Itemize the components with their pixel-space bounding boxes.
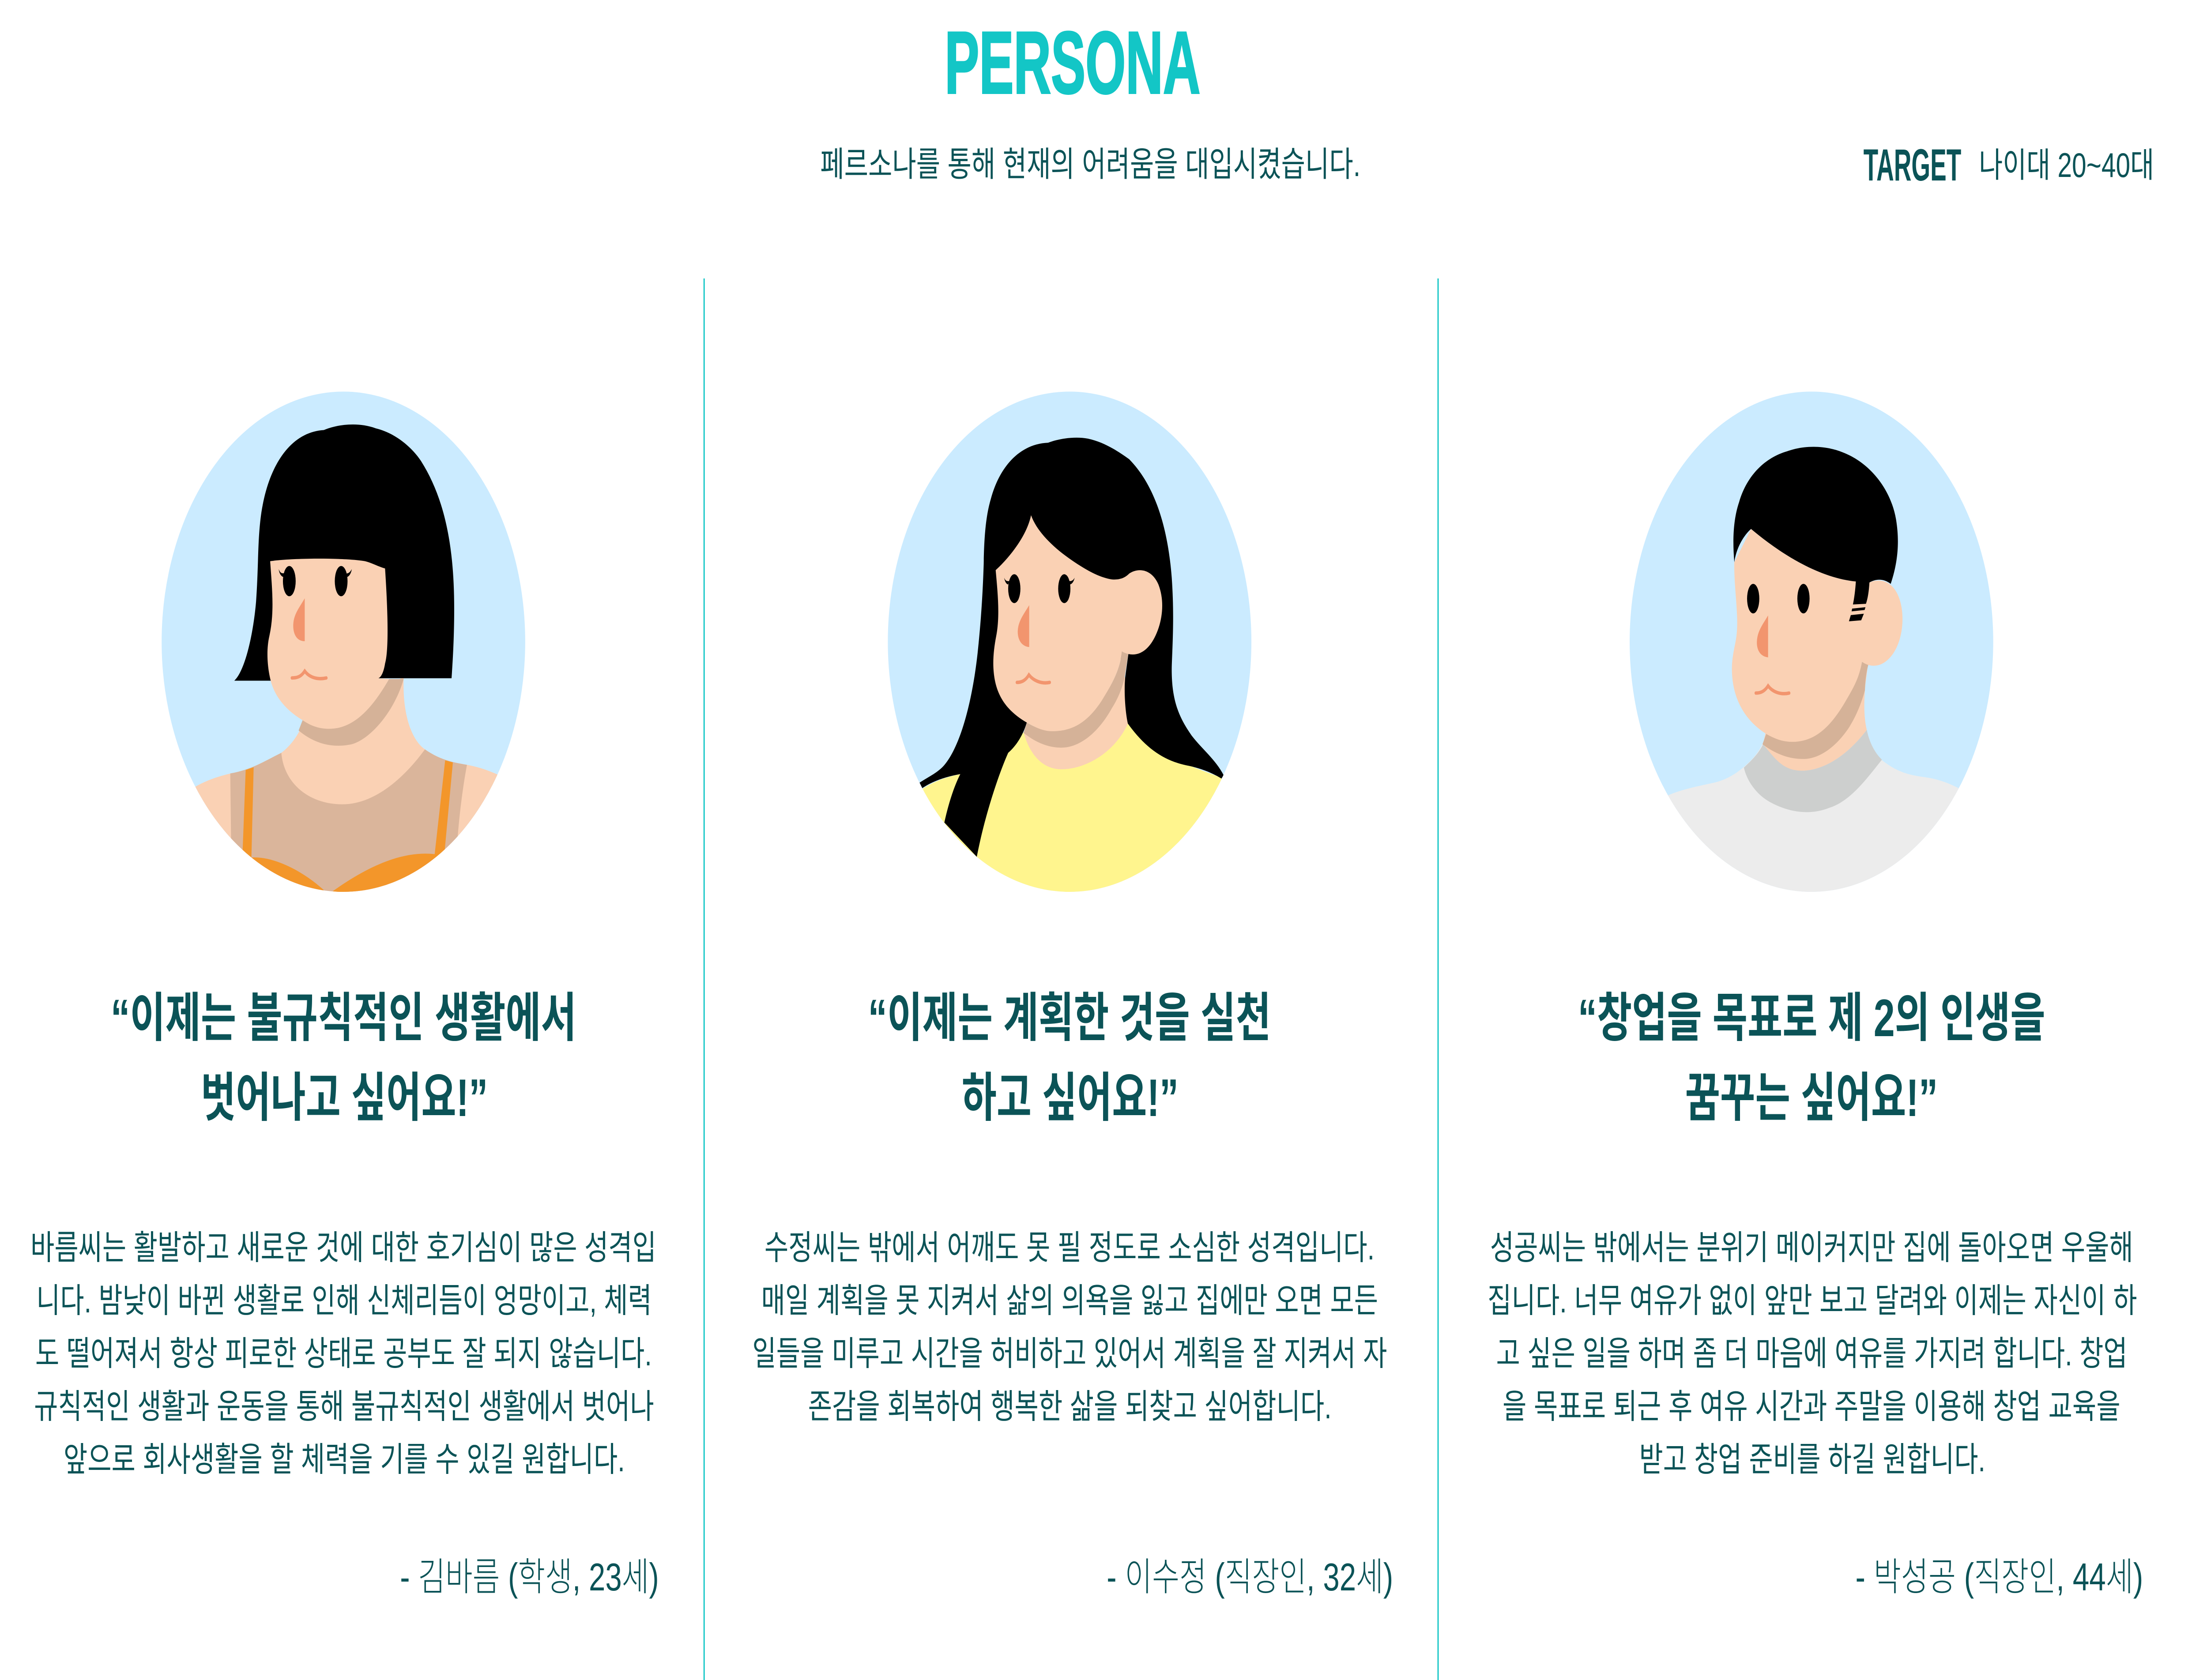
description 1: 니다. 밤낮이 바뀐 생활로 인해 신체리듬이 엉망이고, 체력 [36,1282,652,1320]
panel: persona 2 [752,375,1393,1599]
panel: persona 3 [1488,375,2143,1599]
attribution 1: - 김바름 (학생, 23세) [400,1556,659,1599]
description 3 [1488,1229,2137,1479]
quote heading 3 [1578,988,2045,1128]
description 2 [752,1229,1387,1426]
description 2: 수정씨는 밖에서 어깨도 못 필 정도로 소심한 성격입니다. [765,1229,1375,1267]
description 3: 집니다. 너무 여유가 없이 앞만 보고 달려와 이제는 자신이 하 [1488,1282,2137,1320]
quote heading 3: “창업을 목표로 제 2의 인생을 [1578,988,2045,1048]
column divider left [704,278,705,1680]
subtitle: 페르소나를 통해 현재의 어려움을 대입시켰습니다. [820,145,1360,184]
attribution 2: - 이수정 (직장인, 32세) [1107,1556,1393,1599]
column divider right [1438,278,1439,1680]
quote heading 1: “이제는 불규칙적인 생활에서 [111,988,576,1048]
attribution 3: - 박성공 (직장인, 44세) [1855,1556,2143,1599]
description 1: 도 떨어져서 항상 피로한 상태로 공부도 잘 되지 않습니다. [35,1335,652,1373]
description 2: 매일 계획을 못 지켜서 삶의 의욕을 잃고 집에만 오면 모든 [761,1282,1378,1320]
description 1: 규칙적인 생활과 운동을 통해 불규칙적인 생활에서 벗어나 [34,1388,654,1426]
description 3: 받고 창업 준비를 하길 원합니다. [1639,1441,1985,1479]
description 3: 고 싶은 일을 하며 좀 더 마음에 여유를 가지려 합니다. 창업 [1496,1335,2128,1373]
portrait: short bob hair woman [162,391,525,892]
quote heading 2: “이제는 계획한 것을 실천 [868,988,1271,1048]
description 1: 바름씨는 활발하고 새로운 것에 대한 호기심이 많은 성격입 [30,1229,656,1267]
description 3: 을 목표로 퇴근 후 여유 시간과 주말을 이용해 창업 교육을 [1503,1388,2120,1426]
description 2: 존감을 회복하여 행복한 삶을 되찾고 싶어합니다. [808,1388,1332,1426]
description 2: 일들을 미루고 시간을 허비하고 있어서 계획을 잘 지켜서 자 [752,1335,1387,1373]
panel: persona 1 [30,375,659,1599]
description 1: 앞으로 회사생활을 할 체력을 기를 수 있길 원합니다. [64,1441,625,1479]
portrait: long hair woman [888,391,1251,892]
target label: TARGET [1864,139,1961,190]
quote heading 2: 하고 싶어요!” [962,1068,1179,1128]
quote heading 2 [868,988,1271,1128]
quote heading 3: 꿈꾸는 싶어요!” [1685,1068,1938,1128]
title: PERSONA [945,14,1200,112]
quote heading 1: 벗어나고 싶어요!” [201,1068,488,1128]
description 1 [30,1229,656,1479]
description 3: 성공씨는 밖에서는 분위기 메이커지만 집에 돌아오면 우울해 [1490,1229,2133,1267]
target age range: 나이대 20~40대 [1979,146,2154,184]
quote heading 1 [111,988,576,1128]
portrait: short hair man [1630,391,1993,892]
